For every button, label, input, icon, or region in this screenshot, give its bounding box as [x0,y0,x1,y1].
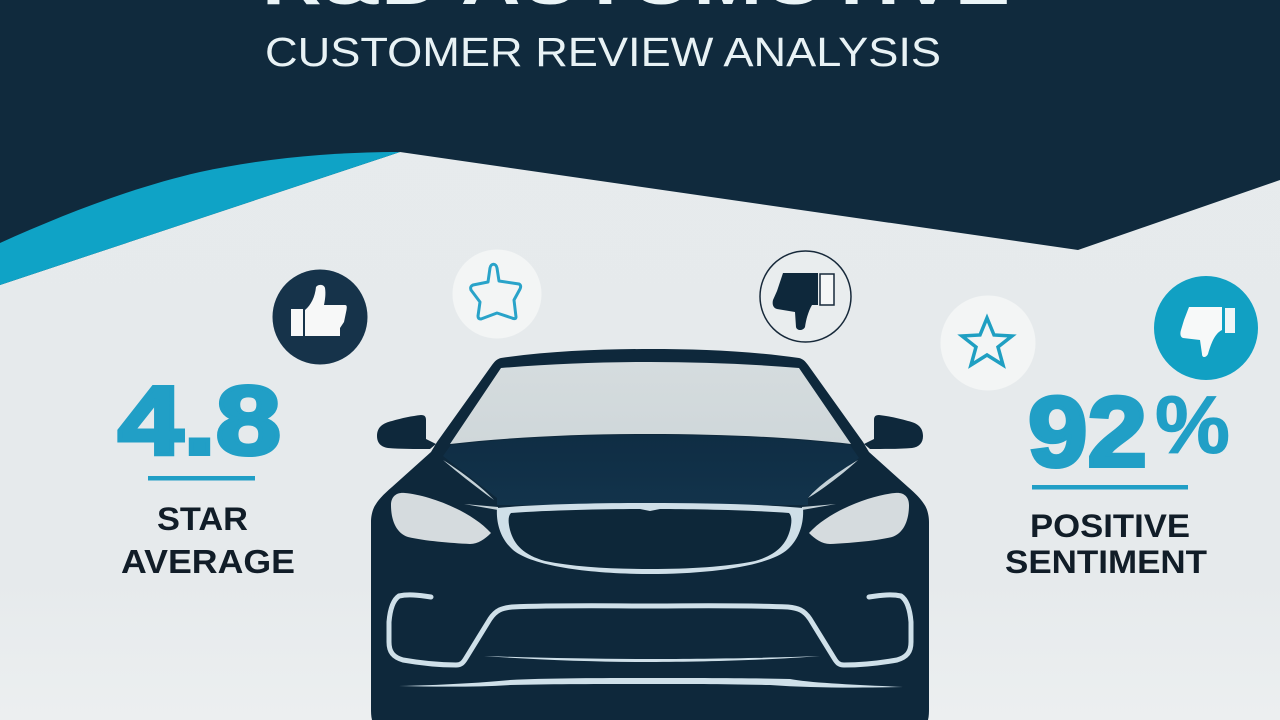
icon: outlined thumbs down badge [760,251,851,342]
stat: 92% positive sentiment: SENTIMENT [1005,544,1207,580]
hood [443,435,859,505]
teal accent swoosh [0,152,400,285]
stat: 92% positive sentiment: 92 [1028,376,1147,487]
stat: 92% positive sentiment: POSITIVE [1030,508,1190,544]
stat: 92% positive sentiment: % [1155,380,1230,471]
stat: 4.8 star average: STAR [157,501,248,537]
car body [371,349,929,720]
header band [0,0,1280,285]
lower bumper trim [389,595,911,665]
left headlight [391,493,491,544]
windshield [450,362,851,444]
bumper lines [399,656,903,688]
icon: thumbs up badge [272,270,368,364]
stat: 4.8 star average [118,366,295,580]
right headlight [809,493,909,544]
car left mirror [377,415,436,449]
grille [497,503,803,574]
icon: teal thumbs down badge [1154,276,1258,380]
stat: 4.8 star average: 4.8 [118,366,281,475]
subtitle: CUSTOMER REVIEW ANALYSIS [265,29,941,75]
car illustration [371,349,929,720]
car right mirror [864,415,923,449]
hood creases [443,460,858,510]
icon: star badge [940,296,1036,390]
icon: star thumb badge [452,250,542,338]
stat: 92% positive sentiment [1005,376,1230,580]
stat: 4.8 star average: AVERAGE [121,543,295,580]
